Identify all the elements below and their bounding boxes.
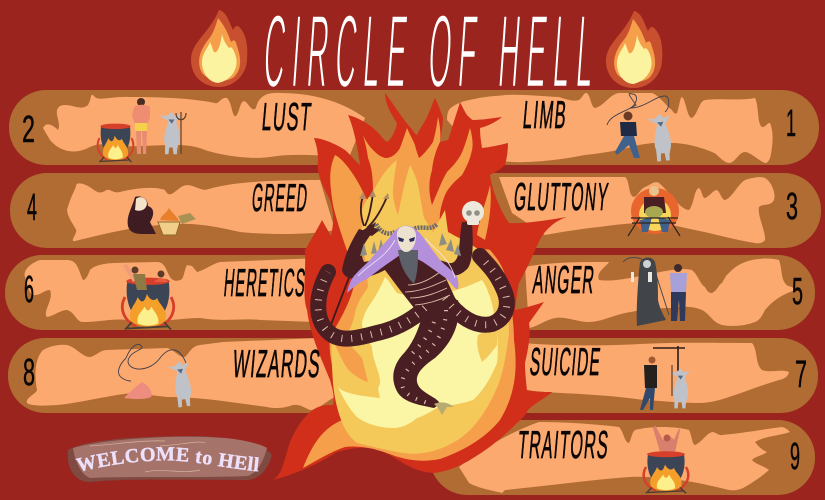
text: ANGER: [531, 259, 597, 302]
text: LUST: [260, 96, 314, 139]
horns: [376, 224, 437, 234]
flame pale core: [338, 277, 498, 428]
old man: [128, 196, 156, 234]
flame outer red: [273, 93, 567, 480]
numbers: 5: [792, 271, 803, 313]
foot: [434, 402, 454, 415]
tentacle right: [445, 256, 507, 325]
sign: welcome to hell: [68, 436, 272, 482]
illustration: demon: [318, 190, 507, 415]
eyes: [398, 237, 415, 242]
man at table: [628, 186, 680, 236]
trident: [327, 190, 389, 335]
text: GLUTTONY: [512, 176, 611, 219]
torso scale lines: [405, 272, 450, 305]
beard: [398, 250, 418, 284]
cauldron: [98, 124, 133, 162]
goat: [167, 360, 195, 408]
sign swirls: [90, 441, 205, 472]
sign back: [68, 436, 272, 482]
scene: lust: [98, 98, 186, 162]
tentacle left: [318, 272, 425, 339]
flame orange tongue left: [335, 335, 368, 382]
numbers: 3: [786, 186, 798, 228]
chest of gold: [158, 208, 196, 235]
man: [132, 98, 150, 154]
panel: peach cave shapes: [25, 93, 795, 493]
fire blob: [631, 188, 679, 234]
torso and arms: [342, 222, 473, 318]
whip: [607, 93, 669, 125]
flame yellow: [332, 160, 509, 454]
man: [615, 112, 640, 158]
text: HERETICS: [222, 262, 308, 305]
man: [640, 356, 657, 410]
hand left: [360, 222, 381, 236]
flame yellow notch right: [477, 322, 497, 362]
text: LIMB: [521, 94, 569, 137]
scene: greed: [128, 196, 196, 235]
beard and hair: [135, 197, 147, 211]
cauldron: [644, 451, 688, 493]
scene: wizards: [119, 344, 195, 408]
icon: right flame: [606, 11, 662, 88]
man arms raised: [653, 425, 680, 452]
spikes: [360, 233, 461, 256]
man covering face: [670, 264, 687, 321]
scene: gluttony: [628, 186, 680, 236]
scene: suicide: [640, 346, 690, 410]
fire inner: [639, 199, 671, 231]
sign text: WELCOME to HEll: [75, 447, 259, 472]
illustration: flames: [273, 93, 567, 480]
gallows: [653, 346, 685, 375]
flame orange right sliver: [477, 185, 491, 240]
scene: heretics: [122, 264, 174, 330]
text: WIZARDS: [231, 343, 323, 386]
reaper: [623, 258, 669, 326]
skull face: [397, 226, 416, 252]
people in cauldron: [123, 264, 168, 290]
numbers: 9: [790, 436, 800, 478]
skull in hand: [462, 201, 484, 225]
goat and fork: [669, 365, 690, 408]
text: TRAITORS: [516, 424, 611, 467]
scene: anger: [623, 258, 687, 326]
hair: [347, 226, 458, 293]
scale marks: [318, 256, 507, 404]
numbers: 4: [27, 187, 37, 229]
numbers: 8: [23, 352, 35, 394]
big cauldron: [122, 278, 174, 330]
flame orange: [303, 117, 516, 468]
scene: traitors: [644, 425, 688, 493]
numbers: 2: [22, 109, 35, 151]
whip: [119, 344, 186, 381]
goat with pitchfork: [159, 112, 186, 154]
icon: left flame: [191, 10, 247, 87]
text: GREED: [250, 177, 310, 220]
hair strands: [358, 238, 455, 278]
numbers: 6: [24, 269, 34, 311]
crouched figure: [124, 382, 152, 399]
numbers: [22, 103, 807, 478]
text: SUICIDE: [528, 341, 603, 384]
numbers: 7: [795, 354, 807, 396]
head: [664, 434, 670, 442]
goat: [646, 112, 674, 162]
leg: [393, 300, 459, 408]
sign face: [73, 437, 267, 478]
scene: limb: [607, 93, 674, 162]
numbers: 1: [786, 103, 796, 145]
